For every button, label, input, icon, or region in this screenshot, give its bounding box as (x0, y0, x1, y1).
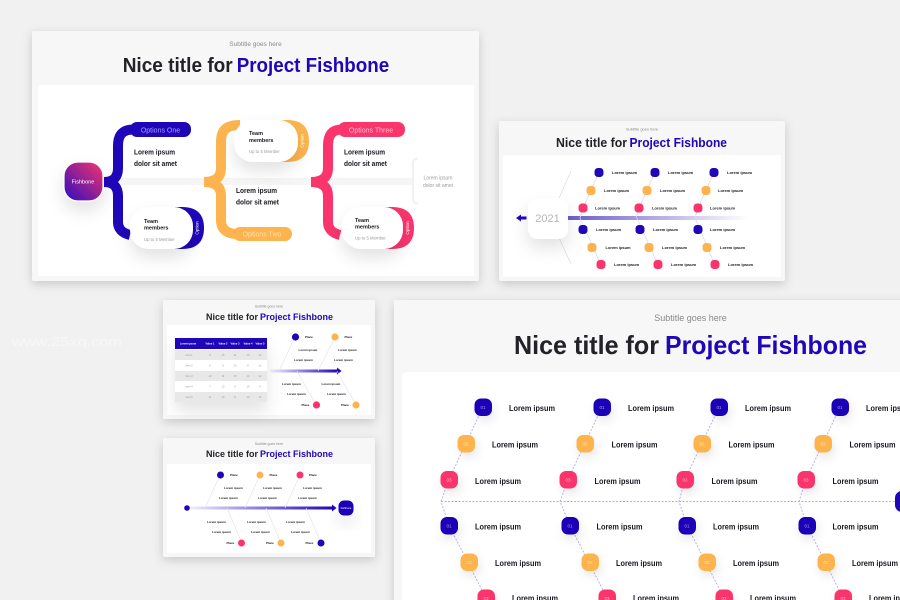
labels: Lorem ipsum (652, 206, 678, 210)
connector lines (580, 172, 715, 265)
icon: fishbone head (64, 162, 103, 201)
table: 10 (209, 374, 212, 378)
labels: Lorem ipsum (251, 530, 270, 534)
title: Project Fishbone (630, 135, 727, 150)
table: 11 (259, 364, 262, 368)
text: lorem three (344, 148, 387, 168)
labels: Lorem ipsum (286, 520, 305, 524)
table: 10 (222, 395, 225, 399)
labels: Lorem ipsum (334, 358, 353, 362)
node labels: Lorem ipsum (596, 522, 643, 532)
title: Project Fishbone (260, 449, 333, 460)
table: 12 (259, 374, 262, 378)
table: 8 (247, 364, 249, 368)
node labels: Lorem ipsum (713, 522, 759, 532)
node labels: Lorem ipsum (628, 403, 674, 413)
node labels: Lorem ipsum (832, 476, 879, 486)
text: lorem one: dolor sit amet (134, 159, 177, 168)
labels: Place (302, 403, 310, 407)
pill: options two (233, 227, 292, 241)
node numbers: 03 (565, 478, 571, 482)
card: team members pink: Team (355, 218, 369, 224)
bones (279, 337, 356, 405)
table: Value 1 (206, 342, 215, 346)
node numbers: 02 (699, 442, 705, 446)
grey brace (413, 158, 418, 204)
labels: Lorem ipsum (322, 382, 341, 386)
subtitle: Subtitle goes here (654, 313, 727, 323)
nodes (292, 333, 360, 409)
labels: Place (266, 541, 274, 545)
labels: Lorem ipsum (720, 245, 746, 250)
labels: Lorem ipsum (668, 170, 694, 175)
labels: Lorem ipsum (212, 530, 231, 534)
node numbers: 03 (682, 478, 688, 482)
node numbers: 01 (567, 524, 573, 528)
node numbers: 02 (463, 442, 469, 446)
labels: Lorem ipsum (660, 188, 686, 193)
card: team members blue: Up to 5 Member (144, 237, 175, 242)
node labels: Lorem ipsum (594, 476, 641, 486)
labels: Place (226, 541, 235, 545)
labels: Lorem ipsum (287, 392, 306, 396)
labels: Lorem ipsum (327, 392, 346, 396)
icon: end node (338, 500, 354, 516)
card: team members pink: members (355, 224, 379, 230)
panel: slide three, table and fishbone (163, 300, 375, 419)
table: Item 4 (185, 384, 193, 388)
labels (207, 473, 322, 545)
node labels: Lorem ipsum (712, 476, 758, 486)
table: 8 (234, 395, 236, 399)
labels: Lorem ipsum (606, 245, 631, 250)
icon: end node (895, 491, 900, 512)
table: 9 (234, 384, 236, 388)
node numbers: 02 (820, 442, 826, 446)
node numbers: 02 (823, 560, 829, 565)
nodes: lower rows (578, 225, 720, 269)
labels: Place (309, 473, 317, 477)
labels: Lorem ipsum (298, 348, 318, 352)
labels: Place (305, 335, 313, 339)
node numbers: 03 (803, 478, 809, 482)
subtitle: Subtitle goes here (255, 304, 283, 308)
node labels: Lorem ipsum (832, 522, 879, 532)
text: lorem three: dolor sit amet (344, 159, 387, 168)
labels: Lorem ipsum (219, 496, 238, 500)
table: 10 (259, 395, 262, 399)
blue brace (104, 130, 134, 235)
title: Project Fishbone (237, 55, 389, 77)
table: 13 (247, 353, 250, 357)
table: 9 (259, 384, 261, 388)
table: Value 3 (231, 342, 240, 346)
table: Value 2 (219, 342, 228, 346)
panel: slide five, enlarged fishbone (394, 300, 900, 600)
card: team members yellow: Team (249, 131, 263, 137)
node labels: Lorem ipsum (612, 440, 658, 450)
table: Value 4 (244, 342, 253, 346)
subtitle: Subtitle goes here (229, 41, 282, 48)
table: 11 (222, 374, 225, 378)
node labels: Lorem ipsum (745, 403, 791, 413)
node numbers: 02 (587, 560, 593, 565)
labels: Lorem ipsum (614, 262, 640, 267)
title (206, 312, 333, 323)
branch 3 nodes (676, 398, 733, 600)
branch 4 nodes (798, 398, 852, 600)
card: team members pink: Up to 5 Member (355, 236, 386, 240)
pill: options three (338, 122, 405, 137)
spine gradient (568, 216, 748, 220)
labels: Place (230, 473, 238, 477)
title (206, 449, 333, 460)
card: team members blue: members (144, 226, 168, 232)
table: 14 (247, 384, 250, 388)
table: 6 (209, 364, 211, 368)
title: Project Fishbone (665, 330, 867, 360)
labels: Lorem ipsum (662, 245, 688, 250)
node labels: Lorem ipsum (616, 558, 662, 568)
arrow: left (516, 214, 526, 222)
table: 15 (234, 374, 237, 378)
title: Nice title for (514, 330, 659, 360)
node numbers: 01 (599, 405, 605, 410)
text: grey lorem: Lorem ipsum (424, 176, 452, 182)
labels: Lorem ipsum (298, 496, 317, 500)
title: Nice title for (206, 312, 258, 323)
pill: options one (130, 122, 191, 137)
pill: options three: Options Three (349, 128, 393, 134)
node labels (475, 403, 900, 600)
labels: Lorem ipsum (727, 170, 753, 175)
text: lorem one (134, 148, 177, 168)
node labels: Lorem ipsum (492, 440, 538, 450)
card: team members blue: Team (144, 219, 158, 225)
table: 12 (222, 384, 225, 388)
node numbers: 01 (446, 524, 452, 528)
text: grey lorem (423, 176, 454, 189)
title (556, 135, 727, 150)
icon: fishbone head: Fishbone (72, 180, 94, 186)
node numbers: 03 (446, 478, 452, 482)
node labels: Lorem ipsum (475, 476, 521, 486)
table: Value 5 (256, 342, 265, 346)
node numbers (446, 405, 846, 600)
node labels: Lorem ipsum (475, 522, 521, 532)
title: Nice title for (206, 449, 258, 460)
labels: Lorem ipsum (612, 170, 638, 175)
labels: Lorem ipsum (596, 227, 622, 232)
table: 9 (222, 364, 224, 368)
node numbers: 01 (684, 524, 690, 528)
watermark: www.25xq.com (11, 334, 122, 349)
table: 12 (234, 364, 237, 368)
labels: Lorem ipsum (671, 262, 697, 267)
bones (205, 475, 321, 543)
table: 7 (209, 384, 211, 388)
labels (282, 335, 357, 407)
labels: Lorem ipsum (718, 188, 744, 193)
node numbers: 02 (704, 560, 710, 565)
panel: slide two, 2021 fishbone (499, 121, 785, 281)
card: team members pink: Option (405, 221, 410, 235)
table: Item 3 (185, 374, 193, 378)
labels: Lorem ipsum (728, 262, 754, 267)
labels: Place (341, 403, 349, 407)
labels: Lorem ipsum (595, 206, 621, 210)
table: Item 5 (185, 395, 193, 399)
labels: Lorem ipsum (207, 520, 226, 524)
card: team members yellow (234, 120, 309, 162)
box: 2021: 2021 (535, 213, 560, 225)
card: team members blue: Option (194, 221, 200, 235)
nodes: upper rows (578, 168, 718, 212)
panel: slide four, horizontal fishbone (163, 438, 375, 557)
spine (104, 178, 412, 185)
labels: Lorem ipsum (604, 188, 630, 193)
table: 5 (209, 353, 211, 357)
labels: Lorem ipsum (710, 227, 736, 232)
labels: Place (306, 541, 314, 545)
pink brace (311, 130, 342, 235)
text: lorem three: Lorem ipsum (344, 148, 385, 156)
table: Item 2 (185, 364, 193, 368)
dashed spine and bones (441, 407, 895, 598)
title: Project Fishbone (260, 312, 333, 323)
arrow: spine (270, 368, 342, 374)
card: team members pink (342, 207, 414, 249)
node numbers: 02 (582, 442, 588, 446)
labels: Lorem ipsum (258, 496, 277, 500)
labels: Lorem ipsum (710, 206, 736, 210)
subtitle: Subtitle goes here (255, 442, 283, 446)
box: 2021 (528, 198, 568, 239)
node labels: Lorem ipsum (509, 403, 555, 413)
text: lorem two (236, 186, 279, 206)
labels: Lorem ipsum (294, 358, 313, 362)
table: 13 (247, 395, 250, 399)
node numbers: 01 (716, 405, 722, 410)
text: grey lorem: dolor sit amet (423, 183, 454, 189)
labels: Lorem ipsum (224, 486, 243, 490)
title (123, 55, 389, 77)
table: 10 (247, 374, 250, 378)
title (514, 330, 867, 360)
table: 14 (259, 353, 262, 357)
labels (595, 170, 754, 267)
labels: Lorem ipsum (653, 227, 679, 232)
panel: slide one, brace fishbone (32, 31, 479, 281)
arrow: spine (187, 504, 336, 512)
table: 11 (209, 395, 212, 399)
table: Lorem ipsum (180, 342, 197, 346)
labels: Lorem ipsum (282, 382, 301, 386)
node numbers: 01 (837, 405, 843, 410)
card: team members blue (130, 207, 204, 249)
table: 15 (222, 353, 225, 357)
card: team members yellow: Up to 5 Member (249, 149, 280, 154)
text: lorem one: Lorem ipsum (134, 148, 175, 156)
nodes (184, 472, 324, 546)
branch 1 nodes (440, 398, 495, 600)
labels: Lorem ipsum (247, 520, 266, 524)
pill: options one: Options One (141, 128, 180, 134)
subtitle: Subtitle goes here (626, 126, 659, 132)
title: Nice title for (123, 55, 233, 77)
grey tail lines (559, 171, 571, 264)
node labels: Lorem ipsum (495, 558, 541, 568)
node labels: Lorem ipsum (733, 558, 779, 568)
card: team members yellow: members (249, 138, 273, 144)
labels: Place (344, 335, 353, 339)
node numbers: 01 (804, 524, 810, 528)
labels: Lorem ipsum (263, 486, 282, 490)
text: lorem two: dolor sit amet (236, 198, 279, 206)
card: team members yellow: Option (300, 134, 304, 148)
node labels: Lorem ipsum (728, 440, 775, 450)
labels: Place (270, 473, 278, 477)
branch 2 nodes (560, 398, 616, 600)
title: Nice title for (556, 135, 627, 150)
pill: options two: Options Two (243, 232, 281, 238)
table: Item 1 (185, 353, 193, 357)
node numbers: 01 (480, 405, 486, 410)
text: lorem two: Lorem ipsum (236, 186, 277, 195)
yellow brace (204, 125, 240, 234)
icon: end node: Fishbone (341, 506, 352, 510)
table: 11 (234, 353, 237, 357)
labels: Lorem ipsum (338, 348, 357, 352)
labels: Lorem ipsum (291, 530, 310, 534)
labels: Lorem ipsum (303, 486, 322, 490)
node numbers: 02 (466, 560, 472, 565)
table (175, 338, 267, 402)
